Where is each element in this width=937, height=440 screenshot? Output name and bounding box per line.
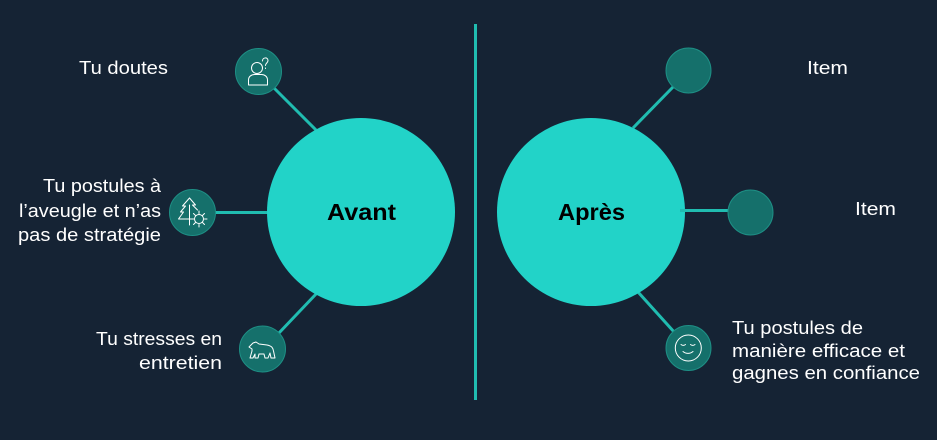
icon: tree and sun: [178, 198, 207, 227]
node: bear icon: [240, 326, 286, 372]
connector: avant to middle node: [215, 211, 268, 214]
label: Item middle: Item: [855, 199, 896, 219]
label: Tu postules à l'aveugle: Tu postules à: [43, 176, 162, 196]
label: Tu postules à l'aveugle: [18, 176, 162, 245]
connector: avant to top node: [274, 88, 316, 130]
node: empty middle right: [728, 190, 773, 235]
icon: smiling face: [675, 335, 701, 361]
node: smile icon: [666, 326, 711, 370]
icon: person with question mark: [248, 58, 268, 85]
label: Tu postules de manière efficace: gagnes en confiance: [732, 363, 920, 383]
label: Tu stresses en entretien: [96, 329, 222, 373]
circle: Après: [497, 118, 685, 306]
node: tree and sun icon: [170, 190, 216, 236]
connector: après to bottom node: [638, 292, 675, 333]
node: doubt icon: [236, 48, 282, 94]
connector: après to top node: [633, 86, 674, 128]
label: Tu postules à l'aveugle: l’aveugle et n’as: [19, 201, 161, 221]
node: empty top right: [666, 48, 711, 93]
label: Tu stresses en entretien: entretien: [139, 353, 222, 373]
label: Item top: Item: [807, 58, 848, 78]
icon: bear: [249, 342, 275, 358]
label: Tu postules à l'aveugle: pas de stratégie: [18, 225, 161, 245]
label: Tu postules de manière efficace: [732, 318, 920, 383]
label: Tu doutes: Tu doutes: [79, 58, 168, 78]
label: Tu postules de manière efficace: Tu postules de: [732, 318, 863, 338]
label: Tu stresses en entretien: Tu stresses en: [96, 329, 222, 349]
central divider: [474, 24, 477, 400]
circle: Après: Après: [558, 199, 625, 225]
connector: avant to bottom node: [278, 293, 317, 334]
connector: après to middle node: [680, 209, 730, 212]
circle: Avant: [267, 118, 455, 306]
circle: Avant: Avant: [327, 199, 396, 225]
label: Tu postules de manière efficace: manière efficace et: [732, 341, 905, 361]
